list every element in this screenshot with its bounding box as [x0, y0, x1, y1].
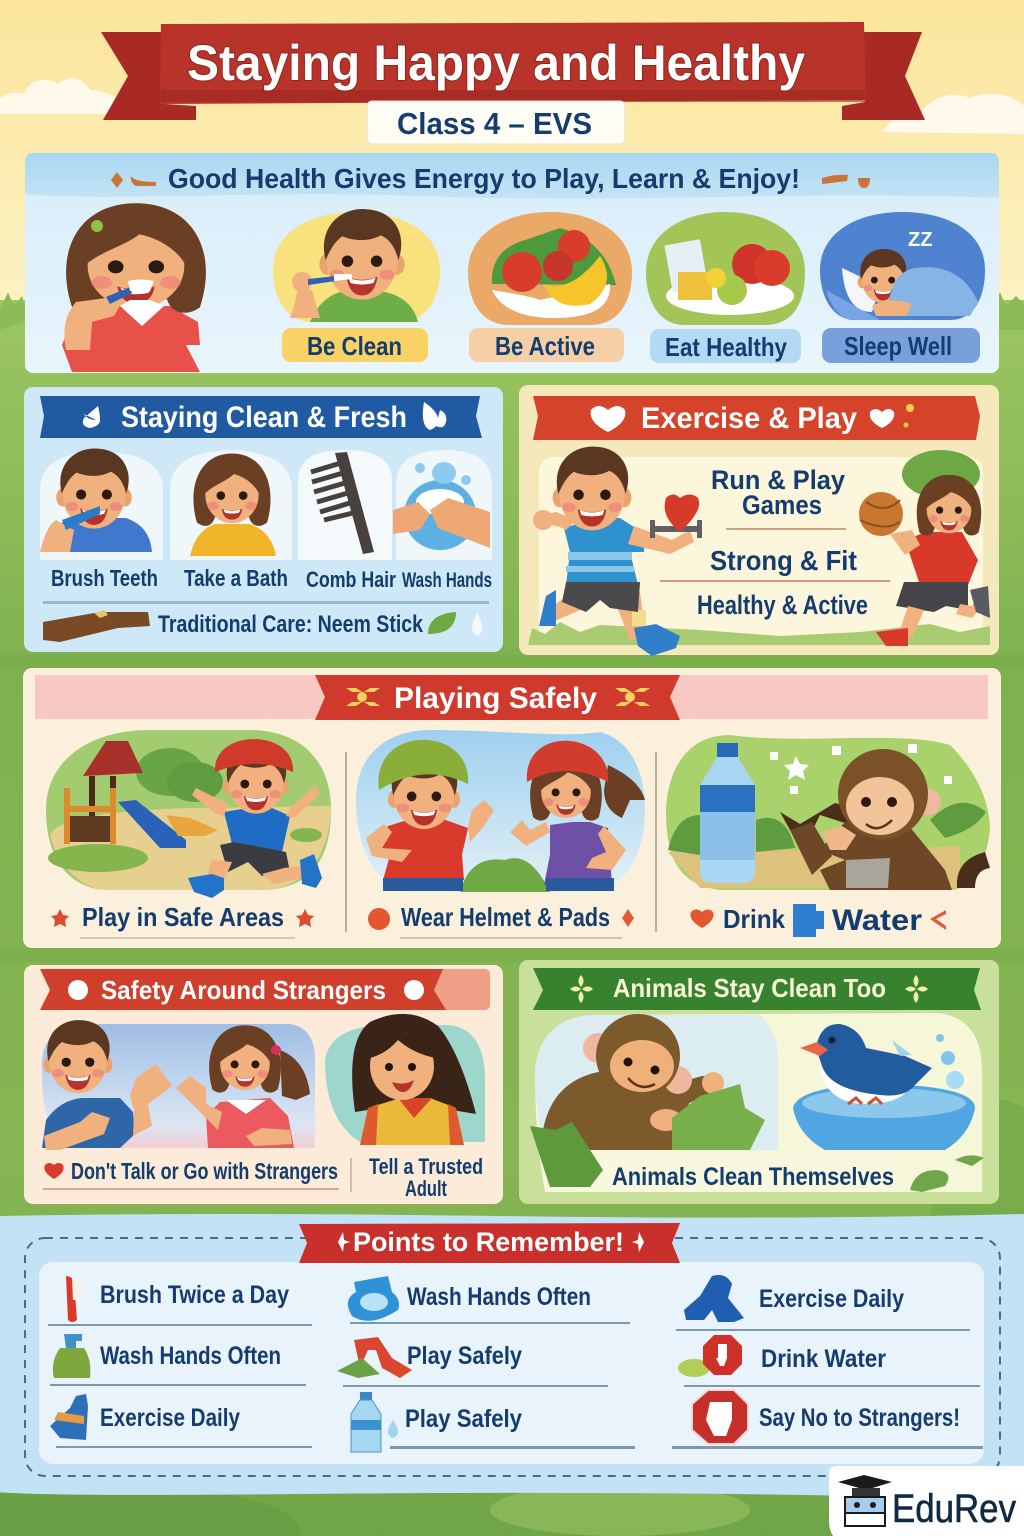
panel heading: Good Health Gives Energy to Play, Learn & Enjoy!	[168, 163, 800, 194]
panel: safety around strangers	[24, 965, 503, 1204]
icon: eat healthy	[646, 212, 805, 325]
point: say no to strangers: Say No to Strangers!	[759, 1404, 960, 1432]
caption	[690, 904, 946, 937]
logo: EduRev	[829, 1466, 1024, 1536]
caption: Wear Helmet & Pads	[401, 902, 610, 932]
scene: helmet and pads	[356, 730, 645, 892]
panel: points to remember	[0, 1214, 1024, 1500]
bird in bath	[793, 1024, 975, 1150]
panel: exercise and play	[519, 385, 999, 656]
exercise text: Healthy & Active	[697, 590, 868, 620]
exercise text: Run & Play	[711, 465, 845, 495]
title text: Staying Happy and Healthy	[187, 35, 805, 91]
point: exercise daily: Exercise Daily	[759, 1285, 904, 1313]
point: wash hands often	[50, 1334, 306, 1386]
section ribbon: Points to Remember!	[353, 1227, 624, 1257]
exercise text	[660, 465, 890, 620]
label: be clean	[282, 328, 428, 362]
panel: playing safely	[23, 668, 1001, 948]
girl brushing teeth	[62, 203, 206, 372]
panel: staying clean and fresh	[24, 387, 503, 652]
label: eat healthy: Eat Healthy	[665, 332, 787, 362]
icon: be active	[468, 212, 632, 325]
section ribbon	[40, 396, 482, 438]
point: exercise daily	[676, 1275, 970, 1331]
card: brush teeth: Brush Teeth	[51, 565, 158, 591]
neem stick	[43, 610, 482, 642]
exercise text: Games	[742, 490, 822, 520]
scene	[530, 1013, 984, 1192]
section ribbon: Staying Clean & Fresh	[121, 401, 407, 434]
icon: sleep well	[820, 212, 985, 320]
section ribbon: Exercise & Play	[641, 402, 857, 435]
point: brush twice a day: Brush Twice a Day	[100, 1281, 289, 1309]
scene: children waving	[42, 1020, 315, 1150]
label: sleep well: Sleep Well	[844, 331, 952, 361]
panel: animals stay clean too	[519, 960, 999, 1204]
card: take a bath	[170, 450, 292, 591]
point: say no to strangers	[672, 1390, 983, 1449]
caption	[368, 902, 634, 939]
cloud right	[882, 94, 1024, 134]
point: wash hands often	[348, 1276, 630, 1324]
section ribbon	[299, 1223, 680, 1263]
caption: Don't Talk or Go with Strangers	[71, 1158, 338, 1184]
caption: Water	[832, 904, 922, 937]
caption: Tell a Trusted	[369, 1154, 483, 1179]
background: sky	[0, 0, 1024, 320]
ground grass	[528, 622, 990, 645]
caption	[369, 1154, 483, 1201]
point: drink water	[678, 1335, 980, 1387]
point: play safely	[351, 1392, 635, 1452]
icon: be clean	[273, 209, 440, 322]
section ribbon	[533, 396, 980, 440]
point: drink water: Drink Water	[761, 1345, 886, 1373]
section ribbon	[533, 968, 981, 1010]
title banner	[101, 22, 925, 120]
scene: safe play area	[46, 730, 331, 898]
caption	[51, 902, 314, 939]
subtitle pill	[367, 101, 625, 144]
monkey	[543, 1014, 765, 1150]
card: brush teeth	[40, 448, 163, 591]
caption: Drink	[723, 904, 785, 934]
card: comb hair: Comb Hair	[306, 567, 396, 592]
divider	[350, 1158, 352, 1192]
point: play safely: Play Safely	[405, 1405, 522, 1433]
caption band	[578, 1155, 907, 1192]
point: exercise daily	[50, 1394, 312, 1448]
card: take a bath: Take a Bath	[184, 565, 288, 591]
girl with ball	[859, 450, 990, 646]
cloud left	[0, 78, 137, 114]
caption: Adult	[405, 1176, 448, 1201]
icon: sleep well: ZZ	[908, 229, 932, 251]
caption: Play in Safe Areas	[82, 902, 284, 932]
scene: drink water with monkey	[666, 735, 990, 890]
neem label: Traditional Care: Neem Stick	[158, 611, 424, 638]
point: play safely	[337, 1337, 608, 1387]
exercise text: Strong & Fit	[710, 545, 857, 576]
point: exercise daily: Exercise Daily	[100, 1404, 240, 1432]
point: brush twice a day	[48, 1276, 312, 1326]
label: be clean: Be Clean	[307, 331, 402, 361]
card: wash hands: Wash Hands	[402, 569, 492, 592]
section ribbon: Safety Around Strangers	[101, 975, 386, 1005]
section ribbon	[40, 969, 490, 1010]
card: comb hair	[298, 450, 396, 592]
scene: trusted adult	[325, 1014, 485, 1145]
point: play safely: Play Safely	[407, 1342, 522, 1370]
label: be active	[469, 328, 624, 362]
section ribbon	[315, 675, 680, 720]
scene: Animals Clean Themselves	[612, 1163, 894, 1191]
section ribbon: Playing Safely	[394, 682, 597, 715]
divider	[655, 752, 657, 932]
card: wash hands	[393, 450, 492, 592]
point: wash hands often: Wash Hands Often	[100, 1342, 281, 1370]
panel: good health	[25, 153, 999, 373]
subtitle pill: Class 4 – EVS	[397, 106, 592, 141]
caption	[43, 1158, 339, 1190]
divider	[345, 752, 347, 932]
running boy with dumbbell	[533, 447, 702, 656]
label: be active: Be Active	[495, 331, 595, 361]
point: wash hands often: Wash Hands Often	[407, 1283, 591, 1311]
section ribbon: Animals Stay Clean Too	[613, 973, 886, 1003]
